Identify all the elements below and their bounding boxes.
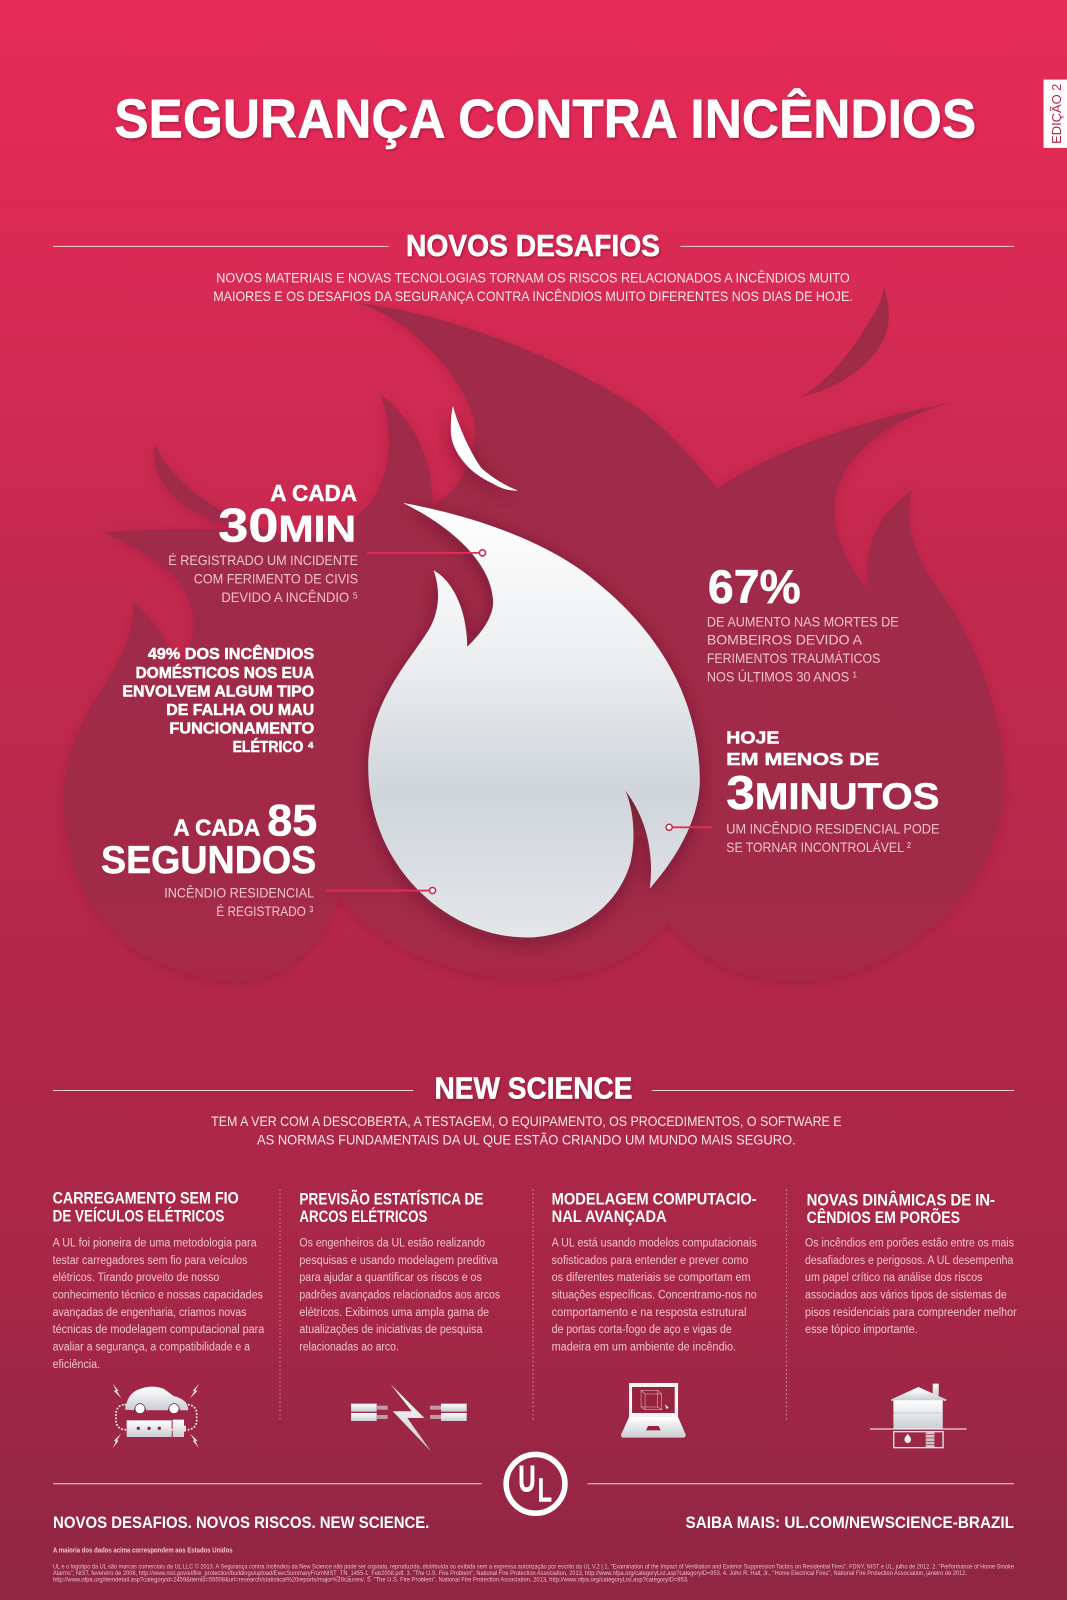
- panel: wireless charging: elétricos. Tirando proveito de nosso: [53, 1270, 220, 1284]
- panel: wireless charging: conhecimento técnico e nossas capacidades: [53, 1288, 263, 1302]
- title: SEGURANÇA CONTRA INCÊNDIOS: [114, 88, 976, 150]
- stat: 67%: DE AUMENTO NAS MORTES DE: [707, 614, 899, 630]
- panel: basement fires: CÊNDIOS EM PORÕES: [807, 1207, 960, 1227]
- panel: computer modeling: os diferentes materiais se comportam em: [552, 1270, 751, 1284]
- icon: electric arc: [351, 1384, 467, 1451]
- stat: 3 minutos: 3MINUTOS: [726, 767, 939, 819]
- stat: a cada 30 min: 30MIN: [218, 500, 356, 552]
- panel: computer modeling: [552, 1190, 757, 1438]
- panel: arc prediction: pesquisas e usando modelagem preditiva: [299, 1253, 498, 1267]
- stat: a cada 85 segundos: [101, 794, 436, 920]
- panel: arc prediction: elétricos. Exibimos uma ampla gama de: [299, 1305, 489, 1319]
- panel: computer modeling: situações específicas. Concentramo-nos no: [552, 1288, 757, 1302]
- learn more link: SAIBA MAIS: UL.COM/NEWSCIENCE-BRAZIL: [685, 1513, 1014, 1532]
- new science intro: [211, 1114, 842, 1149]
- background flame: [64, 303, 1005, 981]
- panel: arc prediction: Os engenheiros da UL estão realizando: [299, 1236, 485, 1250]
- panel: wireless charging: eficiência.: [53, 1357, 100, 1371]
- icon: house basement: [870, 1384, 967, 1448]
- stat: 49% electrical: DOMÉSTICOS NOS EUA: [136, 663, 314, 682]
- panel: computer modeling: de portas corta-fogo de aço e vigas de: [552, 1322, 732, 1336]
- stat: 67%: [707, 561, 899, 685]
- panel: arc prediction: ARCOS ELÉTRICOS: [299, 1207, 427, 1226]
- icon: car charging: [113, 1384, 199, 1448]
- stat: 3 minutos: EM MENOS DE: [726, 749, 879, 769]
- stat: 3 minutos: SE TORNAR INCONTROLÁVEL ²: [726, 839, 911, 856]
- stat: 3 minutos: UM INCÊNDIO RESIDENCIAL PODE: [726, 820, 939, 837]
- stat: 3 minutos: [666, 728, 939, 856]
- stat: 67%: FERIMENTOS TRAUMÁTICOS: [707, 650, 880, 667]
- panel: arc prediction: [299, 1189, 500, 1451]
- stat: 49% electrical: ELÉTRICO ⁴: [233, 737, 314, 756]
- section header: new science: NEW SCIENCE: [435, 1072, 632, 1106]
- panel: basement fires: Os incêndios em porões estão entre os mais: [805, 1236, 1014, 1250]
- footer rule: [53, 1483, 1014, 1485]
- data note: A maioria dos dados acima correspondem aos Estados Unidos: [53, 1548, 233, 1555]
- UL logo: U: [518, 1458, 536, 1499]
- panel: computer modeling: comportamento e na resposta estrutural: [552, 1305, 746, 1319]
- panel: basement fires: desafiadores e perigosos. A UL desempenha: [805, 1253, 1014, 1267]
- panel: basement fires: [805, 1191, 1017, 1448]
- stat: 67%: 67%: [708, 561, 801, 613]
- panel: wireless charging: técnicas de modelagem computacional para: [53, 1322, 265, 1336]
- intro text: NOVOS MATERIAIS E NOVAS TECNOLOGIAS TORNAM OS RISCOS RELACIONADOS A INCÊNDIOS MUITO: [216, 270, 850, 287]
- stat: a cada 85 segundos: 85: [267, 794, 317, 845]
- stat: a cada 85 segundos: A CADA: [173, 814, 260, 840]
- intro text: [213, 270, 853, 305]
- panel: wireless charging: testar carregadores sem fio para veículos: [53, 1253, 247, 1267]
- panel: computer modeling: sofisticados para entender e prever como: [552, 1253, 749, 1267]
- panel: wireless charging: avaliar a segurança, a compatibilidade e a: [53, 1340, 250, 1354]
- stat: a cada 30 min: É REGISTRADO UM INCIDENTE: [168, 552, 358, 569]
- stat: 67%: BOMBEIROS DEVIDO A: [707, 633, 862, 649]
- UL logo: L: [538, 1473, 552, 1510]
- tagline: NOVOS DESAFIOS. NOVOS RISCOS. NEW SCIENCE.: [53, 1513, 429, 1532]
- panel: arc prediction: PREVISÃO ESTATÍSTICA DE: [299, 1189, 483, 1209]
- stat: a cada 30 min: COM FERIMENTO DE CIVIS: [194, 571, 358, 587]
- panel: arc prediction: padrões avançados relacionados aos arcos: [299, 1288, 500, 1302]
- stat: 67%: NOS ÚLTIMOS 30 ANOS ¹: [707, 668, 857, 685]
- stat: 49% electrical: [122, 644, 314, 756]
- panel: basement fires: um papel crítico na análise dos riscos: [805, 1270, 982, 1284]
- stat: 49% electrical: 49% DOS INCÊNDIOS: [148, 644, 314, 663]
- panel: arc prediction: relacionadas ao arco.: [299, 1340, 399, 1354]
- stat: a cada 30 min: DEVIDO A INCÊNDIO ⁵: [221, 589, 358, 606]
- panel: wireless charging: DE VEÍCULOS ELÉTRICOS: [53, 1207, 224, 1226]
- panel: wireless charging: A UL foi pioneira de uma metodologia para: [53, 1236, 257, 1250]
- white flame spark: [451, 406, 518, 491]
- panel: basement fires: associados aos vários tipos de sistemas de: [805, 1288, 1007, 1302]
- panel: wireless charging: [53, 1189, 265, 1448]
- panel: arc prediction: atualizações de iniciativas de pesquisa: [299, 1322, 483, 1336]
- stat: 49% electrical: DE FALHA OU MAU: [166, 702, 314, 719]
- legal references: [53, 1563, 1015, 1584]
- panel: arc prediction: para ajudar a quantificar os riscos e os: [299, 1270, 482, 1284]
- UL logo: [506, 1454, 565, 1513]
- stat: 49% electrical: FUNCIONAMENTO: [169, 720, 314, 737]
- stat: 49% electrical: ENVOLVEM ALGUM TIPO: [122, 684, 314, 701]
- stat: a cada 85 segundos: É REGISTRADO ³: [216, 903, 313, 920]
- icon: laptop: [621, 1383, 686, 1438]
- white flame: [368, 503, 700, 937]
- panel: basement fires: NOVAS DINÂMICAS DE IN-: [807, 1191, 995, 1210]
- stat: a cada 85 segundos: SEGUNDOS: [101, 839, 316, 882]
- panel: basement fires: pisos residenciais para compreender melhor: [805, 1305, 1017, 1319]
- panel: computer modeling: MODELAGEM COMPUTACIO-: [552, 1190, 757, 1209]
- legal references: Alarms", NIST, fevereiro de 2008, http://www.nist.gov/el/fire_protection/buildings/upload/ExecSummaryFromNIST_TN_1455-1_Feb2008.pdf. 3. "The U.S. Fire Problem", National Fire Protection Association, 2013, http://www.nfpa.org/categoryList.asp?categoryID=953. 4. John R. Hall, Jr., "Home Electrical Fires", National Fire Protection Association, janeiro de 2012,: [53, 1570, 967, 1577]
- new science intro: TEM A VER COM A DESCOBERTA, A TESTAGEM, O EQUIPAMENTO, OS PROCEDIMENTOS, O SOFTWARE E: [211, 1114, 842, 1130]
- badge: edition 2: EDIÇÃO 2: [1049, 84, 1064, 144]
- stat: a cada 30 min: A CADA: [270, 480, 357, 506]
- intro text: MAIORES E OS DESAFIOS DA SEGURANÇA CONTRA INCÊNDIOS MUITO DIFERENTES NOS DIAS DE HOJE.: [213, 288, 853, 305]
- stat: 3 minutos: HOJE: [726, 728, 779, 748]
- panel: basement fires: esse tópico importante.: [805, 1322, 918, 1336]
- panel: wireless charging: avançadas de engenharia, criamos novas: [53, 1305, 246, 1319]
- panel: computer modeling: NAL AVANÇADA: [552, 1207, 667, 1226]
- legal references: http://www.nfpa.org/itemdetail.asp?categoryid=2459&itemid=55508&url=research/statistical%20reports/major%20causes/. 5. "The U.S. Fire Problem", National Fire Protection Association, 2013, http://www.nfpa.org/categoryList.asp?categoryID=953.: [53, 1577, 689, 1584]
- badge: edition 2: [1044, 80, 1067, 148]
- panel: computer modeling: madeira em um ambiente de incêndio.: [552, 1340, 736, 1354]
- stat: a cada 85 segundos: INCÊNDIO RESIDENCIAL: [164, 885, 314, 902]
- panel: wireless charging: CARREGAMENTO SEM FIO: [53, 1189, 239, 1208]
- stat: a cada 30 min: [168, 480, 486, 606]
- new science intro: AS NORMAS FUNDAMENTAIS DA UL QUE ESTÃO CRIANDO UM MUNDO MAIS SEGURO.: [257, 1132, 796, 1149]
- panel: computer modeling: A UL está usando modelos computacionais: [552, 1236, 757, 1250]
- background flame crescent: [801, 287, 889, 397]
- section header: novos desafios: NOVOS DESAFIOS: [406, 229, 660, 263]
